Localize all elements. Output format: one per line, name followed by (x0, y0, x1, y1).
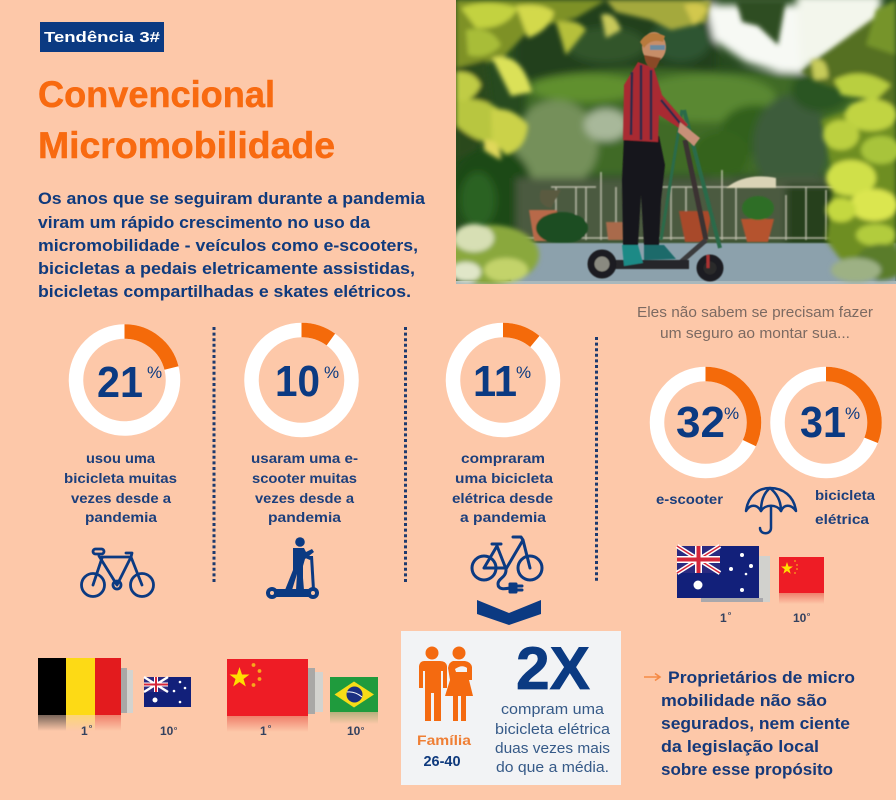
caption: bicycle use: vezes desde a (71, 490, 171, 506)
donut: 11%: 11 (473, 357, 517, 406)
flag: Australia, 1st: 1 (720, 611, 727, 625)
scooter (685, 140, 706, 240)
flag: China, 10th: o (807, 612, 810, 618)
caption: bicycle use (64, 450, 177, 525)
text: description: duas vezes mais (495, 741, 610, 757)
text: callout message: da legislação local (661, 737, 819, 756)
flag: China, 10th (779, 557, 824, 625)
title (38, 74, 335, 166)
icon: umbrella (746, 488, 796, 533)
flag: Belgium, 1st: 1 (81, 724, 88, 738)
icon: bicycle (82, 549, 154, 596)
flag: Brazil, 10th: o (361, 726, 364, 732)
caption: bicycle use: pandemia (85, 509, 157, 525)
label: bicicleta elétrica: bicicleta (815, 487, 875, 503)
label: Família 26-40: 26-40 (423, 754, 461, 770)
arrow: chevron down (477, 600, 541, 625)
panel: family statistic (401, 631, 621, 785)
flag: China, 1st (227, 659, 323, 738)
icon: person on scooter (266, 537, 319, 599)
donut: 32%: % (724, 404, 739, 423)
photo: man on e-scooter in garden (443, 0, 896, 285)
title: Convencional (38, 74, 275, 115)
flag: Belgium, 1st (38, 658, 133, 738)
caption: e-scooter use: vezes desde a (255, 490, 354, 506)
intro paragraph: Os anos que se seguiram durante a pandemia (38, 190, 426, 208)
flag: China, 1st: 1 (260, 724, 267, 738)
donut: 11%: % (516, 363, 531, 382)
flag: Belgium, 1st: o (89, 724, 92, 730)
caption: electric bicycle purchase: elétrica desde (452, 490, 553, 506)
donut: 11% (453, 330, 553, 430)
icon: family couple (419, 646, 473, 721)
caption: electric bicycle purchase: a pandemia (460, 509, 546, 525)
donut: 31% (778, 374, 874, 471)
flag: Brazil, 10th: 10 (347, 724, 361, 738)
intro paragraph (38, 190, 426, 301)
caption: electric bicycle purchase: uma bicicleta (455, 470, 553, 486)
stat: 2X: 2X (516, 635, 590, 702)
donut: 31%: 31 (800, 398, 846, 447)
label: e-scooter: e-scooter (656, 491, 724, 507)
text: description: do que a média. (496, 760, 609, 776)
label: bicicleta elétrica: elétrica (815, 511, 869, 527)
icon: electric bicycle (472, 537, 542, 592)
badge: Tendência 3# (40, 22, 164, 52)
flag: Brazil, 10th (330, 677, 378, 738)
caption: bicycle use: bicicleta muitas (64, 470, 177, 486)
donut: 32%: 32 (676, 398, 725, 447)
flag: China, 1st: o (268, 724, 271, 730)
flag: Australia, 1st: o (728, 611, 731, 617)
donut: 21%: % (147, 363, 162, 382)
caption: electric bicycle purchase: compraram (461, 450, 545, 466)
flag: China, 10th: 10 (793, 611, 807, 625)
text: insurance question: um seguro ao montar sua... (660, 326, 850, 342)
intro paragraph: viram um rápido crescimento no uso da (38, 214, 371, 232)
arrow: orange (644, 674, 660, 680)
flag: Australia, 10th: o (174, 726, 177, 732)
intro paragraph: bicicletas compartilhadas e skates elétricos. (38, 283, 411, 301)
caption: e-scooter use: scooter muitas (252, 470, 357, 486)
label: Família 26-40 (417, 732, 471, 770)
badge: Tendência 3#: Tendência 3# (44, 29, 161, 46)
flag: Australia, 10th (144, 677, 191, 738)
title: Micromobilidade (38, 125, 335, 166)
callout: owners not insured (644, 668, 855, 779)
donut: 21% (76, 332, 173, 428)
text: callout message: segurados, nem ciente (661, 714, 850, 733)
label: bicicleta elétrica (815, 487, 875, 527)
label: Família 26-40: Família (417, 732, 471, 748)
text: insurance question: Eles não sabem se precisam fazer (637, 305, 873, 321)
donut: 10% (252, 330, 352, 430)
text: insurance question (637, 305, 873, 342)
intro paragraph: bicicletas a pedais eletricamente assistidas, (38, 260, 415, 278)
text: description (495, 702, 611, 776)
donut: 10%: % (324, 363, 339, 382)
caption: electric bicycle purchase (452, 450, 553, 525)
donut: 32% (657, 374, 754, 471)
flag: Australia, 10th: 10 (160, 724, 174, 738)
text: callout message: sobre esse propósito (661, 760, 833, 779)
donut: 10%: 10 (275, 357, 320, 406)
text: callout message: Proprietários de micro (668, 668, 855, 687)
caption: e-scooter use (251, 450, 358, 525)
intro paragraph: micromobilidade - veículos como e-scooters, (38, 237, 418, 255)
foreground foliage (443, 0, 896, 285)
caption: e-scooter use: pandemia (268, 509, 341, 525)
man (622, 136, 665, 245)
caption: bicycle use: usou uma (86, 450, 155, 466)
text: description: compram uma (501, 702, 605, 718)
donut: 31%: % (845, 404, 860, 423)
text: description: bicicleta elétrica (495, 722, 611, 738)
donut: 21%: 21 (97, 358, 143, 407)
flag: Australia, 1st (677, 546, 770, 625)
caption: e-scooter use: usaram uma e- (251, 450, 358, 466)
text: callout message: mobilidade não são (661, 691, 827, 710)
text: callout message (661, 668, 855, 779)
